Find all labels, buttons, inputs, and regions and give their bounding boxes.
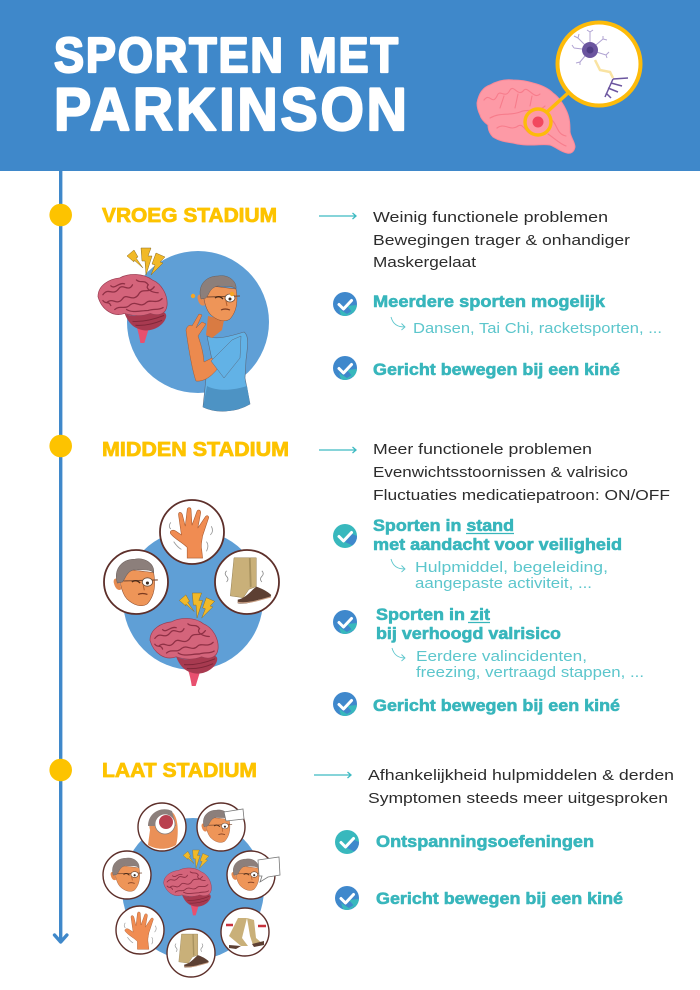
heading: laat stadium: LAAT STADIUM (102, 759, 257, 782)
advice: gericht bewegen vroeg: Gericht bewegen bij een kiné (373, 360, 620, 379)
stage marker: vroeg (49, 204, 72, 226)
advice: ontspanningsoefeningen (335, 830, 594, 854)
advice: meerdere sporten: Dansen, Tai Chi, racketsporten, ... (413, 320, 662, 337)
advice: sporten in zit: bij verhoogd valrisico (376, 624, 561, 643)
advice: sporten in stand (333, 516, 622, 592)
arrow: laat (314, 772, 351, 778)
timeline line with arrow (54, 170, 67, 942)
advice: sporten in zit: freezing, vertraagd stappen, ... (416, 664, 644, 681)
advice: sporten in zit: Sporten in zit (376, 605, 490, 624)
symptoms: laat: Symptomen steeds meer uitgesproken (368, 790, 668, 807)
stage marker: laat (49, 759, 72, 781)
symptoms: vroeg (373, 209, 630, 271)
advice: gericht bewegen midden (333, 692, 620, 716)
title (54, 27, 410, 143)
symptoms: laat (368, 767, 674, 807)
advice: ontspanningsoefeningen: Ontspanningsoefeningen (376, 832, 594, 851)
advice: gericht bewegen laat (335, 886, 623, 910)
advice: gericht bewegen midden: Gericht bewegen bij een kiné (373, 696, 620, 715)
advice: gericht bewegen vroeg (333, 356, 620, 380)
symptoms: midden: Fluctuaties medicatiepatroon: ON/OFF (373, 487, 670, 504)
symptoms: vroeg: Maskergelaat (373, 254, 477, 271)
arrow: vroeg (319, 213, 356, 219)
advice: sporten in stand: Sporten in stand (373, 516, 514, 535)
illustration: late stage symptom circles (103, 803, 280, 977)
advice: gericht bewegen laat: Gericht bewegen bij een kiné (376, 889, 623, 908)
title: PARKINSON (54, 77, 410, 143)
advice: sporten in zit (333, 605, 644, 681)
advice: sporten in zit: Eerdere valincidenten, (416, 648, 587, 665)
symptoms: midden: Meer functionele problemen (373, 441, 592, 458)
advice: sporten in stand: aangepaste activiteit, ... (415, 575, 592, 592)
heading: vroeg stadium: VROEG STADIUM (102, 204, 277, 227)
arrow: midden (319, 447, 356, 453)
header banner (0, 0, 700, 171)
stage marker: midden (49, 435, 72, 457)
title: SPORTEN MET (54, 27, 400, 82)
symptoms: midden: Evenwichtsstoornissen & valrisico (373, 464, 628, 481)
symptoms: vroeg: Weinig functionele problemen (373, 209, 608, 226)
advice: sporten in stand: Hulpmiddel, begeleiding, (415, 559, 608, 576)
symptoms: vroeg: Bewegingen trager & onhandiger (373, 232, 630, 249)
advice: meerdere sporten: Meerdere sporten mogelijk (373, 292, 606, 311)
illustration: middle stage symptom circles (104, 500, 279, 686)
advice: sporten in stand: met aandacht voor veiligheid (373, 535, 622, 554)
icon: brain with neuron magnifier (477, 22, 640, 153)
heading: midden stadium: MIDDEN STADIUM (102, 438, 289, 461)
symptoms: laat: Afhankelijkheid hulpmiddelen & derden (368, 767, 674, 784)
advice: meerdere sporten (333, 292, 662, 337)
symptoms: midden (373, 441, 670, 504)
illustration: early stage brain and thinking man (98, 248, 269, 411)
